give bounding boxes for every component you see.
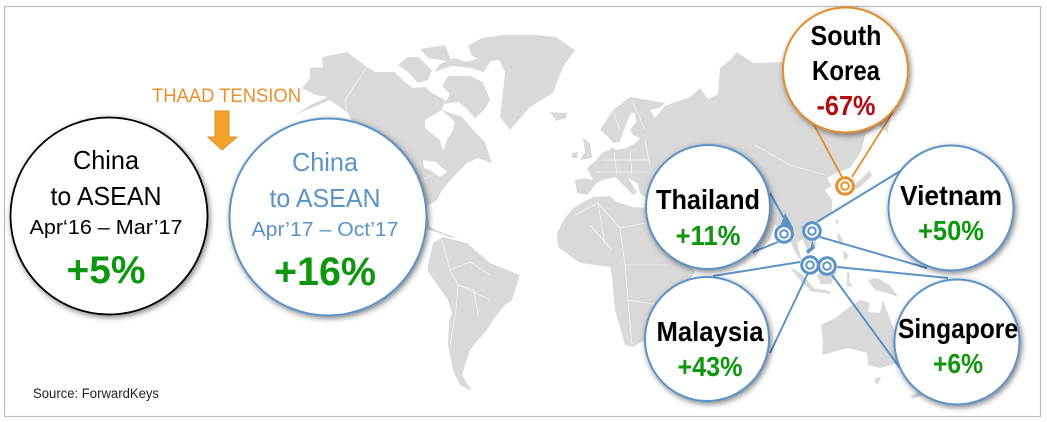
bubble: vietnam: +50% <box>918 215 984 246</box>
bubble: vietnam <box>888 146 1014 270</box>
bubble: south korea <box>783 8 908 132</box>
map: eurasia <box>575 40 895 262</box>
china to asean before: Apr‘16 – Mar’17 <box>30 217 182 239</box>
marker: singapore <box>819 258 835 274</box>
bubble: south korea: -67% <box>816 90 876 121</box>
marker: vietnam <box>804 223 820 239</box>
marker: south korea <box>837 178 853 194</box>
china to asean after <box>230 118 426 316</box>
map: north america <box>295 52 492 210</box>
callout lines: asean <box>713 170 948 368</box>
map: greenland <box>485 35 575 130</box>
map: central america <box>405 205 458 238</box>
china to asean before: China <box>73 145 140 175</box>
marker: malaysia <box>802 257 818 273</box>
map: new guinea <box>868 278 898 297</box>
map: new zealand <box>910 390 925 399</box>
china to asean after: Apr’17 – Oct’17 <box>252 219 398 241</box>
source: Source: ForwardKeys <box>33 386 159 401</box>
china to asean before: +5% <box>66 249 146 292</box>
bubble: singapore <box>894 280 1020 404</box>
map: indonesia <box>790 267 853 294</box>
china to asean before: to ASEAN <box>50 181 162 211</box>
map: south america <box>427 237 520 391</box>
china to asean after: +16% <box>274 250 376 294</box>
bubble: malaysia: +43% <box>678 351 742 382</box>
china to asean before <box>10 118 208 314</box>
bubble: singapore: Singapore <box>898 313 1018 344</box>
map: great britain <box>580 138 592 160</box>
map: japan <box>848 170 872 193</box>
highlighted countries <box>781 213 815 254</box>
bubble: malaysia: Malaysia <box>656 316 764 347</box>
map: australia <box>821 300 905 368</box>
map: tasmania <box>875 377 881 384</box>
china to asean after: China <box>292 147 359 177</box>
bubble: thailand: +11% <box>676 220 740 251</box>
map: arctic islands <box>398 57 432 83</box>
thaad tension label: THAAD TENSION <box>152 85 301 107</box>
bubble: malaysia <box>645 277 769 401</box>
bubble: south korea: Korea <box>812 55 881 86</box>
bubble: thailand <box>646 145 770 269</box>
world map <box>295 35 925 399</box>
bubble: south korea: South <box>810 20 882 51</box>
map: ireland <box>572 152 578 158</box>
bubble: thailand: Thailand <box>656 184 760 215</box>
china to asean after: to ASEAN <box>270 183 380 213</box>
map: iceland <box>550 112 567 121</box>
arrow: thaad down arrow <box>208 111 237 150</box>
map: taiwan and philippines <box>836 219 849 260</box>
bubble: vietnam: Vietnam <box>900 180 1002 211</box>
map: africa <box>557 196 695 347</box>
bubble: singapore: +6% <box>933 348 983 379</box>
callout lines: south korea <box>813 112 893 177</box>
marker: thailand <box>776 226 792 242</box>
